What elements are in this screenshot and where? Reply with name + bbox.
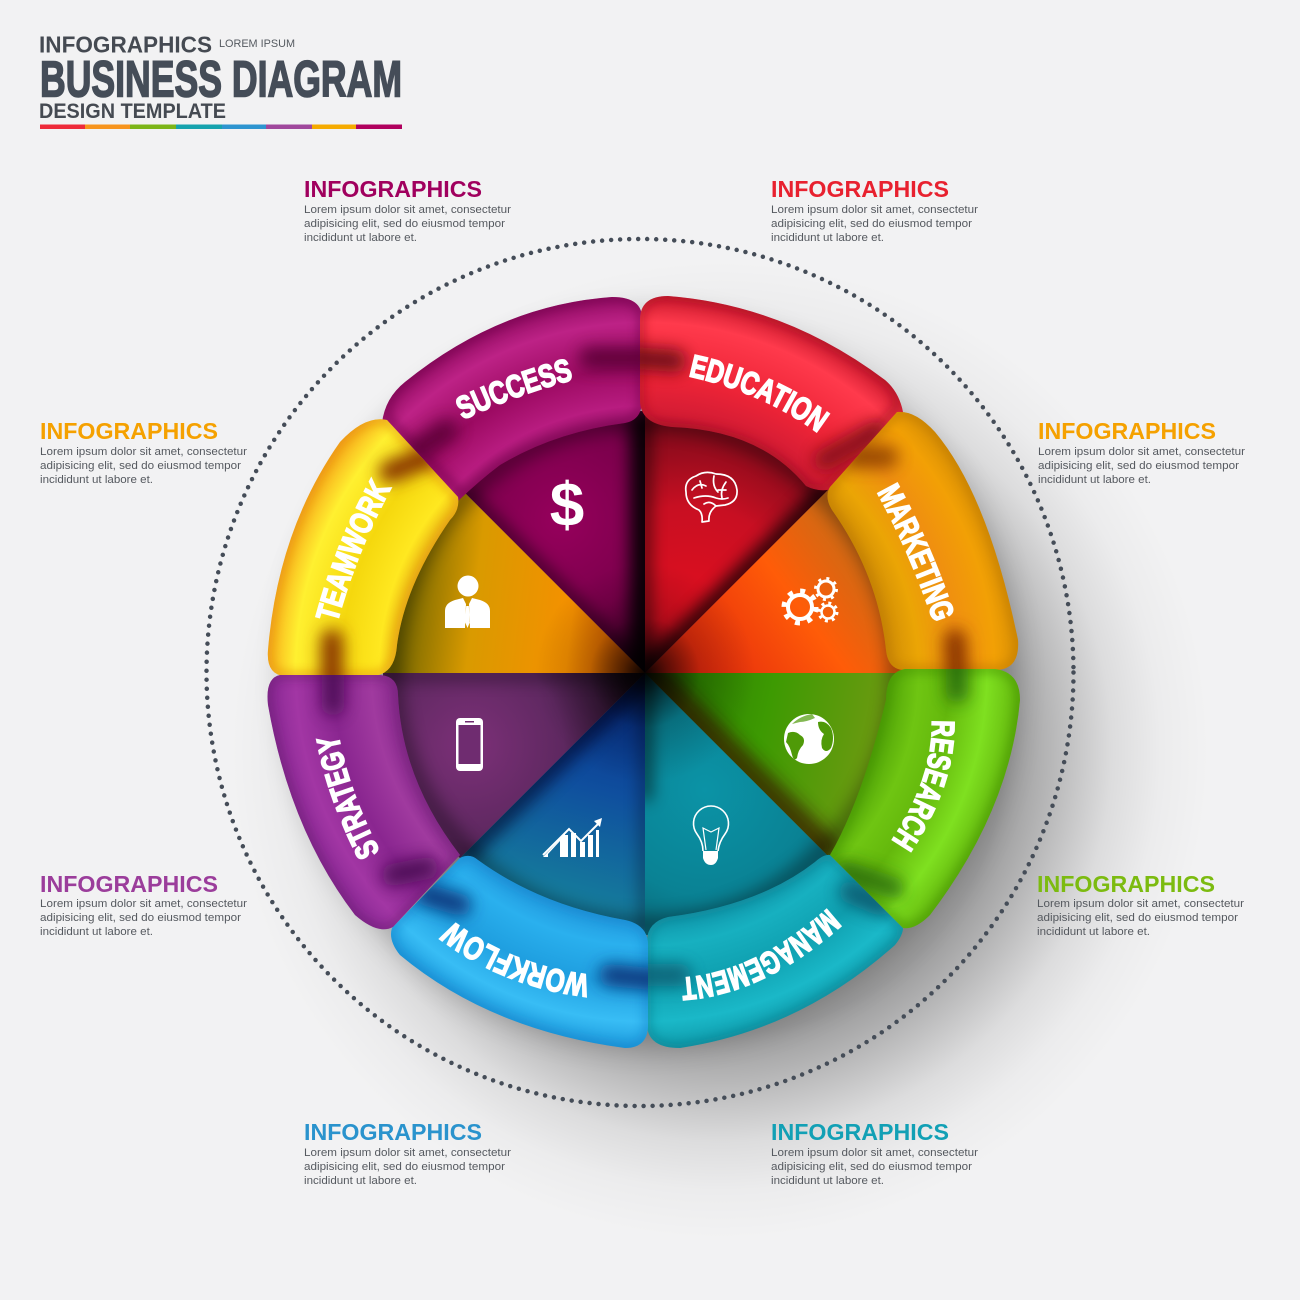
label: strategy: STRATEGY [316, 738, 378, 860]
rainbow rule [40, 124, 402, 129]
text block: strategy: INFOGRAPHICS [40, 871, 218, 897]
band: management [647, 854, 903, 1048]
label: success: SUCCESS [456, 359, 572, 418]
text block: workflow [304, 1119, 511, 1187]
text block: education: Lorem ipsum dolor sit amet, consectetur [771, 204, 978, 216]
text block: workflow: adipisicing elit, sed do eiusmod tempor [304, 1161, 505, 1173]
band: strategy [268, 675, 460, 930]
text block: marketing: incididunt ut labore et. [1038, 474, 1151, 486]
text block: management: Lorem ipsum dolor sit amet, consectetur [771, 1147, 978, 1159]
subheading: lorem ipsum: LOREM IPSUM [219, 38, 295, 50]
dotted ring [206, 239, 1074, 1106]
text block: workflow: INFOGRAPHICS [304, 1119, 482, 1145]
text block: strategy [40, 871, 247, 938]
wedge: education [645, 411, 830, 673]
long diagonal shadow of the wheel [230, 260, 1210, 1240]
wedge: marketing [645, 488, 907, 673]
text block: teamwork: adipisicing elit, sed do eiusmod tempor [40, 460, 241, 472]
text block: workflow: incididunt ut labore et. [304, 1175, 417, 1187]
text block: workflow: Lorem ipsum dolor sit amet, consectetur [304, 1147, 511, 1159]
label: marketing: MARKETING [876, 482, 954, 621]
label: teamwork: TEAMWORK [315, 476, 392, 618]
text block: research: Lorem ipsum dolor sit amet, consectetur [1037, 898, 1244, 910]
text block: strategy: incididunt ut labore et. [40, 926, 153, 938]
text block: marketing: Lorem ipsum dolor sit amet, consectetur [1038, 446, 1245, 458]
wedge: teamwork [383, 488, 645, 673]
wedge: management [645, 673, 830, 935]
text block: research [1037, 871, 1244, 938]
text block: success: Lorem ipsum dolor sit amet, consectetur [304, 204, 511, 216]
text block: research: adipisicing elit, sed do eiusmod tempor [1037, 912, 1238, 924]
band: workflow [391, 856, 648, 1048]
text block: success: adipisicing elit, sed do eiusmod tempor [304, 218, 505, 230]
band: research [830, 669, 1020, 928]
text block: marketing: adipisicing elit, sed do eiusmod tempor [1038, 460, 1239, 472]
text block: marketing: INFOGRAPHICS [1038, 418, 1216, 444]
text block: success: INFOGRAPHICS [304, 176, 482, 202]
wheel: inner pie wedges [383, 411, 907, 935]
text block: teamwork: INFOGRAPHICS [40, 418, 218, 444]
icon: smartphone [456, 718, 483, 771]
text block: education [771, 176, 978, 244]
heading: infographics: INFOGRAPHICS [39, 32, 212, 58]
text block: success [304, 176, 511, 244]
wedge: research [645, 673, 907, 858]
label: research: RESEARCH [891, 721, 956, 853]
icon: businessman [445, 576, 490, 628]
soft contact shadow under wheel [282, 312, 1018, 1048]
band: teamwork [268, 419, 458, 675]
wedge: workflow [460, 673, 645, 935]
text block: education: INFOGRAPHICS [771, 176, 949, 202]
text block: strategy: adipisicing elit, sed do eiusmod tempor [40, 912, 241, 924]
text block: marketing [1038, 418, 1245, 486]
wedge: strategy [383, 673, 645, 858]
icon: gears [784, 578, 837, 623]
text block: research: INFOGRAPHICS [1037, 871, 1215, 897]
text block: management: adipisicing elit, sed do eiusmod tempor [771, 1161, 972, 1173]
text block: teamwork: Lorem ipsum dolor sit amet, consectetur [40, 446, 247, 458]
band: education [640, 296, 903, 490]
hub darkening [535, 563, 755, 783]
main title: BUSINESS DIAGRAM [40, 50, 402, 108]
text block: education: adipisicing elit, sed do eiusmod tempor [771, 218, 972, 230]
band: marketing [827, 412, 1018, 670]
label: education: EDUCATION [689, 354, 830, 433]
icon: brain [686, 472, 737, 522]
shadow cast by the bands on the wedges [393, 421, 897, 925]
text block: education: incididunt ut labore et. [771, 232, 884, 244]
wedge: success [460, 411, 645, 673]
band: success [382, 297, 641, 501]
text block: management [771, 1119, 978, 1187]
text block: research: incididunt ut labore et. [1037, 926, 1150, 938]
text block: strategy: Lorem ipsum dolor sit amet, consectetur [40, 898, 247, 910]
text block: management: INFOGRAPHICS [771, 1119, 949, 1145]
icon: light bulb [694, 806, 728, 865]
label: workflow: WORKFLOW [438, 922, 587, 998]
text block: success: incididunt ut labore et. [304, 232, 417, 244]
icon: growth chart [543, 818, 602, 857]
text block: management: incididunt ut labore et. [771, 1175, 884, 1187]
text block: teamwork [40, 418, 247, 486]
label: management: MANAGEMENT [682, 908, 842, 1001]
header title block [39, 32, 402, 129]
icon: dollar: $ [550, 471, 584, 540]
text block: teamwork: incididunt ut labore et. [40, 474, 153, 486]
subtitle: design template: DESIGN TEMPLATE [39, 99, 226, 123]
icon: globe [784, 714, 834, 764]
